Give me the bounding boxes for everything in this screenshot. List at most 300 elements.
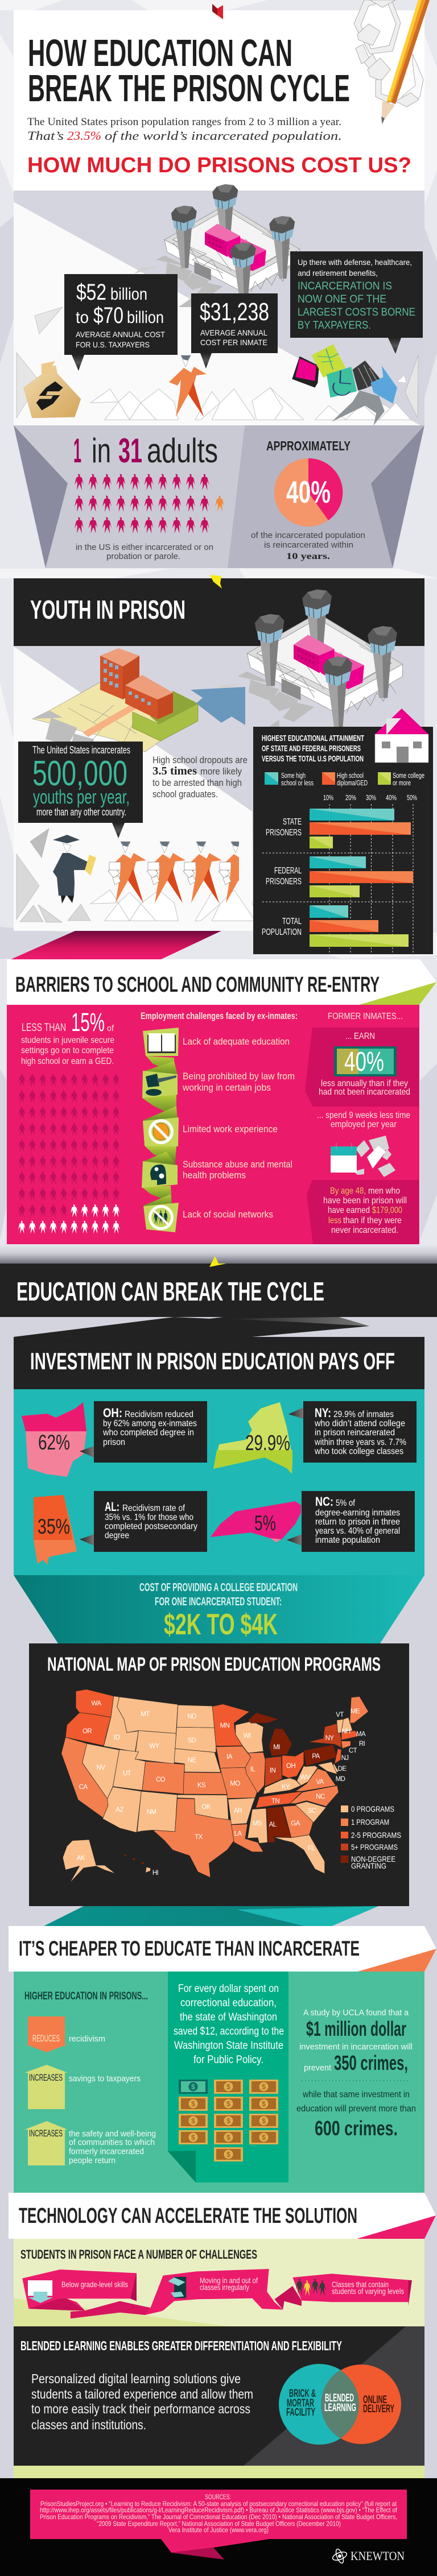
ground triangles bbox=[90, 388, 411, 420]
stat: 1 in 31 adults: 31 bbox=[118, 432, 142, 470]
text: challenge labels: Classes that contain bbox=[332, 2280, 389, 2289]
callout: NC: 5% of bbox=[336, 1498, 355, 1508]
map: state labels: NE bbox=[188, 1757, 196, 1764]
text: employment challenges: Substance abuse and mental bbox=[183, 1159, 292, 1170]
stat: earn 40% less: 40% bbox=[344, 1047, 384, 1077]
chart title: HIGHEST EDUCATIONAL ATTAINMENT bbox=[262, 734, 364, 743]
map: state labels: AR bbox=[234, 1808, 242, 1815]
stat: less than 15% bbox=[21, 1008, 114, 1066]
bar labels: PRISONERS bbox=[266, 828, 302, 838]
map: state labels: ME bbox=[351, 1708, 360, 1715]
callout: cost per inmate: $31,238 bbox=[200, 298, 269, 326]
arrow: increases savings: INCREASES bbox=[29, 2072, 63, 2083]
callout: largest costs: Up there with defense, healthcare, bbox=[298, 258, 412, 267]
map: state labels: MN bbox=[220, 1722, 230, 1729]
map legend: GRANTING bbox=[351, 1861, 386, 1870]
stat: lifetime earnings: By age 48, bbox=[330, 1186, 366, 1196]
illustration: prison building bbox=[212, 590, 403, 731]
state: North Carolina: 5% bbox=[254, 1511, 276, 1535]
callout: largest costs: BY TAXPAYERS. bbox=[298, 320, 371, 332]
pictogram: dollar bills bbox=[179, 2080, 278, 2161]
text: every dollar spent: for Public Policy. bbox=[193, 2054, 263, 2066]
pictogram: 100 students bbox=[18, 1074, 119, 1234]
panel: youth in prison bbox=[14, 575, 433, 954]
ribbon: three challenges bbox=[22, 2269, 412, 2318]
callout: OH: OH: bbox=[103, 1406, 122, 1420]
map: state labels: NH bbox=[341, 1728, 351, 1735]
panel: cheaper to educate bbox=[9, 1926, 436, 2193]
callout: OH: Recidivism reduced bbox=[125, 1410, 193, 1419]
heading: approximately: APPROXIMATELY bbox=[266, 438, 351, 453]
state: Ohio: 62% bbox=[38, 1431, 70, 1454]
strip: lime footer edge bbox=[14, 2466, 424, 2478]
chart: 40% pie bbox=[274, 458, 343, 527]
panel: sources bbox=[30, 2490, 407, 2539]
chart axis bbox=[262, 793, 417, 952]
text: reincarceration caption: of the incarcerated population bbox=[251, 531, 365, 540]
icon: taxpayer with burden blocks bbox=[292, 344, 406, 425]
icon: book bbox=[143, 1028, 179, 1056]
map legend: 5+ PROGRAMS bbox=[351, 1842, 398, 1852]
text: personalized digital learning: to more easily track their performance across bbox=[31, 2401, 250, 2416]
callout: NC: NC: bbox=[315, 1494, 333, 1509]
ribbon: teal fold bbox=[44, 1906, 378, 1926]
callout: OH: by 62% among ex-inmates bbox=[103, 1419, 197, 1428]
callout: OH bbox=[80, 1401, 207, 1463]
icon: red bookmark bbox=[212, 4, 223, 19]
text: 9 weeks: employed per year bbox=[331, 1120, 397, 1129]
chart legend: school or less bbox=[281, 778, 314, 787]
text: every dollar spent: For every dollar spent on bbox=[178, 1983, 279, 1995]
stat: less than 15%: 15% bbox=[71, 1008, 105, 1037]
chart axis: 10% bbox=[323, 793, 333, 802]
icon: money bag bbox=[24, 361, 81, 418]
bar labels: POPULATION bbox=[262, 927, 302, 937]
text: UCLA study: investment in incarceration will bbox=[299, 2042, 413, 2052]
decorative triangles bbox=[17, 829, 90, 922]
text: 1 in 31 caption bbox=[76, 542, 213, 561]
map: state labels: NY bbox=[325, 1735, 334, 1742]
map: state labels: OK bbox=[201, 1804, 211, 1811]
icon: prisoner figure bbox=[169, 355, 207, 417]
map: state labels: OR bbox=[83, 1728, 92, 1735]
text: reincarceration caption: 10 years. bbox=[286, 552, 330, 561]
chart legend bbox=[265, 771, 424, 787]
stat: lifetime earnings: never incarcerated. bbox=[331, 1225, 398, 1235]
text: high school dropouts: more likely bbox=[200, 766, 242, 777]
illustration: school bbox=[32, 648, 198, 753]
map: state labels: MO bbox=[230, 1780, 240, 1787]
panel: barriers to re-entry bbox=[7, 959, 436, 1244]
heading: main title bbox=[28, 32, 350, 110]
callout: AL: degree bbox=[105, 1531, 129, 1540]
stat: lifetime earnings bbox=[307, 1180, 419, 1244]
stat: lifetime earnings: less bbox=[328, 1216, 341, 1225]
stat: earn 40% less: had not been incarcerated bbox=[319, 1087, 410, 1097]
text: UCLA study: while that same investment in bbox=[302, 2090, 410, 2099]
stat: 1 in 31 adults: 1 bbox=[73, 432, 81, 470]
arrow: increases savings: savings to taxpayers bbox=[69, 2074, 141, 2084]
text: high school dropouts: 3.5 times bbox=[152, 765, 197, 777]
banner: education can break the cycle bbox=[0, 1256, 437, 1337]
panel: sources: “2009 State Expenditure Report,” National Association of State Budget Officers (December 2010) bbox=[97, 2520, 341, 2528]
icon: yellow bookmark bbox=[210, 575, 222, 589]
text: challenge labels: Below grade-level skills bbox=[61, 2280, 128, 2289]
map: state labels: WY bbox=[149, 1743, 160, 1750]
stat: lifetime earnings: than if they were bbox=[343, 1216, 402, 1225]
callout: 500,000 youths: more than any other country. bbox=[36, 806, 126, 818]
panel: national map bbox=[29, 1643, 409, 1906]
pictogram: dollar bills: $ bbox=[191, 2082, 196, 2091]
map: state labels: IN bbox=[270, 1767, 275, 1774]
map legend: 2-5 PROGRAMS bbox=[351, 1830, 401, 1840]
map: state labels: AZ bbox=[116, 1807, 123, 1813]
text: UCLA study bbox=[296, 2008, 416, 2140]
icon: graduate bbox=[53, 835, 96, 904]
stat: less than 15%: LESS THAN bbox=[22, 1022, 66, 1034]
text: UCLA study: A study by UCLA found that a bbox=[303, 2008, 409, 2018]
text: intro: 23.5% bbox=[67, 129, 101, 143]
callout: largest costs: LARGEST COSTS BORNE bbox=[298, 307, 415, 318]
text: personalized digital learning bbox=[31, 2371, 253, 2432]
stat: lifetime earnings: have earned bbox=[328, 1206, 370, 1215]
arrow: increases safety: people return bbox=[69, 2156, 116, 2165]
chart title: VERSUS THE TOTAL U.S POPULATION bbox=[262, 754, 364, 764]
bar labels: PRISONERS bbox=[266, 877, 302, 887]
column: washington state bbox=[168, 1972, 288, 2182]
panel: 1 in 31 adults and 40% bbox=[14, 425, 424, 568]
map: state labels: IL bbox=[250, 1766, 255, 1773]
arrow: reduces recidivism: recidivism bbox=[69, 2034, 105, 2044]
decorative triangles bbox=[17, 307, 418, 418]
state: Alabama bbox=[34, 1495, 77, 1565]
map legend: NON-DEGREE bbox=[351, 1854, 395, 1863]
icon: book with down arrow bbox=[28, 2280, 53, 2303]
chart axis: 20% bbox=[345, 793, 356, 802]
callout: AL bbox=[80, 1491, 207, 1552]
map: state labels: VA bbox=[316, 1779, 324, 1786]
stat: less than 15%: of bbox=[107, 1024, 114, 1033]
ribbon: pink fold bbox=[11, 931, 221, 959]
arrow: increases savings bbox=[24, 2065, 141, 2109]
map legend: 0 PROGRAMS bbox=[351, 1804, 394, 1813]
ground triangles bbox=[90, 889, 411, 921]
map: state labels: NM bbox=[147, 1809, 156, 1816]
callout: OH: who completed degree in bbox=[102, 1428, 194, 1438]
text: reincarceration caption bbox=[251, 531, 365, 561]
callout: AL: 35% vs. 1% for those who bbox=[105, 1513, 193, 1522]
panel: title header bbox=[14, 0, 430, 190]
stat: 1 in 31 adults: adults bbox=[147, 432, 218, 470]
icon: house bbox=[375, 709, 428, 763]
text: 1 in 31 caption: probation or parole. bbox=[106, 552, 180, 561]
callout: NY: who took college classes bbox=[314, 1447, 403, 1456]
panel: cost of college education: COST OF PROVIDING A COLLEGE EDUCATION bbox=[139, 1581, 298, 1594]
map: state labels: UT bbox=[123, 1770, 131, 1777]
chart legend: Some college bbox=[393, 771, 424, 780]
callout: cost per inmate: AVERAGE ANNUAL bbox=[200, 328, 267, 337]
state: Ohio bbox=[22, 1402, 86, 1477]
arrow: school to prison bbox=[191, 687, 245, 725]
bar labels: STATE bbox=[283, 817, 302, 827]
stat: earn 40% less: ... EARN bbox=[345, 1032, 375, 1041]
bar chart bbox=[310, 809, 413, 947]
map legend bbox=[341, 1804, 401, 1870]
map: state labels: SC bbox=[308, 1808, 316, 1815]
stat: lifetime earnings: men who bbox=[368, 1186, 400, 1196]
map: state labels: ND bbox=[187, 1713, 196, 1720]
chart axis: 30% bbox=[366, 793, 376, 802]
arrow: increases safety: formerly incarcerated bbox=[69, 2147, 144, 2156]
heading: former inmates: FORMER INMATES... bbox=[328, 1012, 403, 1021]
stat: 1 in 31 adults bbox=[73, 432, 218, 470]
text: high school dropouts bbox=[152, 755, 248, 800]
illustration: prison building bbox=[134, 184, 300, 307]
map: state labels: TX bbox=[195, 1834, 203, 1841]
text: every dollar spent: correctional education, bbox=[180, 1997, 277, 2009]
chart legend: High school bbox=[337, 771, 364, 780]
icon: no social networks bbox=[143, 1203, 179, 1232]
text: personalized digital learning: classes and institutions. bbox=[31, 2417, 146, 2432]
stat: earn 40% less: less annually than if they bbox=[321, 1079, 408, 1088]
text: challenge labels: students of varying levels bbox=[332, 2287, 404, 2296]
callout: largest costs: NOW ONE OF THE bbox=[298, 293, 386, 305]
text: employment challenges: Limited work experience bbox=[183, 1124, 278, 1134]
callout: NY: 29.9% of inmates bbox=[333, 1410, 394, 1419]
chart: 40% pie: 40% bbox=[286, 474, 331, 510]
chart: blended learning venn diagram: LEARNING bbox=[324, 2402, 356, 2414]
panel: blended learning bbox=[14, 2326, 424, 2466]
panel: prison costs bbox=[14, 184, 424, 428]
callout: largest costs: INCARCERATION IS bbox=[298, 280, 392, 292]
bar labels bbox=[262, 817, 302, 937]
chart: blended learning venn diagram: DELIVERY bbox=[363, 2403, 394, 2415]
map: state labels: NV bbox=[97, 1765, 105, 1771]
heading: students face challenges: STUDENTS IN PRISON FACE A NUMBER OF CHALLENGES bbox=[20, 2247, 257, 2262]
icon: pencil breaking handcuffs bbox=[354, 0, 430, 124]
callout: 500,000 youths bbox=[18, 742, 143, 838]
text: 9 weeks bbox=[317, 1111, 410, 1129]
chart title: OF STATE AND FEDERAL PRISONERS bbox=[262, 744, 361, 753]
map: state labels: VT bbox=[336, 1712, 344, 1718]
panel: sources: SOURCES: bbox=[205, 2493, 231, 2501]
chart title bbox=[262, 734, 364, 764]
chart axis: 40% bbox=[386, 793, 397, 802]
chart: blended learning venn diagram: BLENDED bbox=[325, 2392, 354, 2404]
callout: NY: NY: bbox=[315, 1406, 331, 1420]
map: state labels: ID bbox=[114, 1734, 119, 1741]
heading: main title: HOW EDUCATION CAN bbox=[28, 32, 292, 74]
callout: largest costs: and retirement benefits, bbox=[298, 268, 378, 278]
stat: lifetime earnings: $179,000 bbox=[372, 1206, 402, 1215]
chart: blended learning venn diagram: MORTAR bbox=[287, 2397, 314, 2409]
map: state labels: MS bbox=[253, 1820, 262, 1827]
chart legend: diploma/GED bbox=[337, 778, 368, 787]
bar labels: FEDERAL bbox=[274, 866, 302, 876]
text: every dollar spent: Washington State Institute bbox=[174, 2040, 283, 2052]
callout: total annual cost: $70 bbox=[93, 303, 123, 328]
panel: cost of college education: FOR ONE INCARCERATED STUDENT: bbox=[155, 1596, 282, 1608]
map: state labels: RI bbox=[359, 1741, 365, 1747]
text: employment challenges: health problems bbox=[183, 1170, 246, 1181]
callout: NC: years vs. 40% of general bbox=[315, 1526, 400, 1536]
callout: 500,000 youths: youths per year, bbox=[33, 786, 130, 808]
chart: blended learning venn diagram: BRICK & bbox=[289, 2388, 316, 2400]
logo: Knewton: KNEWTON bbox=[351, 2549, 405, 2563]
icon: people of varying levels bbox=[296, 2279, 326, 2296]
callout: total annual cost: billion bbox=[110, 285, 147, 304]
chart: blended learning venn diagram: ONLINE bbox=[363, 2394, 387, 2406]
map: state labels: SD bbox=[188, 1737, 196, 1744]
callout: cost per inmate: COST PER INMATE bbox=[200, 338, 267, 347]
map: state labels: KS bbox=[197, 1782, 206, 1789]
text: employment challenges: working in certain jobs bbox=[182, 1082, 271, 1093]
callout: NY: in prison reincarerated bbox=[315, 1428, 395, 1438]
icon: door with arrows bbox=[168, 2277, 186, 2298]
map: state labels: IA bbox=[226, 1754, 233, 1761]
text: personalized digital learning: students a tailored experience and allow them bbox=[31, 2387, 253, 2401]
stat: earn 40% less bbox=[305, 1028, 419, 1107]
map: US states bbox=[61, 1689, 369, 1883]
map: state labels: CO bbox=[156, 1776, 166, 1783]
text: challenge labels bbox=[61, 2276, 404, 2296]
map: state labels: HI bbox=[152, 1870, 159, 1877]
map: state labels: LA bbox=[234, 1830, 242, 1837]
callout: total annual cost: billion bbox=[127, 308, 164, 327]
text: UCLA study: education will prevent more than bbox=[296, 2104, 416, 2114]
map: state labels bbox=[77, 1700, 366, 1877]
text: intro bbox=[27, 116, 342, 143]
callout: total annual cost bbox=[64, 274, 178, 371]
map: state labels: OH bbox=[286, 1763, 295, 1770]
map: state labels: AK bbox=[77, 1855, 85, 1862]
callout: AL: completed postsecondary bbox=[105, 1522, 197, 1531]
callout: NY: who didn’t attend college bbox=[314, 1419, 405, 1428]
chart legend: Some high bbox=[281, 771, 306, 780]
text: UCLA study: 600 crimes. bbox=[315, 2117, 398, 2140]
text: employment challenges bbox=[182, 1036, 295, 1220]
callout: NC: degree-earning inmates bbox=[315, 1508, 400, 1518]
panel: cost of college education: $2K TO $4K bbox=[164, 1608, 278, 1641]
map: state labels: TN bbox=[271, 1798, 279, 1805]
stat: lifetime earnings: have been in prison will bbox=[323, 1196, 407, 1206]
map: state labels: KY bbox=[282, 1784, 290, 1791]
map: state labels: NC bbox=[316, 1794, 325, 1800]
icon: calendar bbox=[331, 1136, 395, 1177]
stat: less than 15%: students in juvenile secure bbox=[21, 1036, 114, 1045]
text: challenge labels: Moving in and out of bbox=[200, 2276, 258, 2285]
panel: educational attainment chart bbox=[253, 709, 433, 954]
icons: prisoners in a row bbox=[108, 842, 239, 903]
callout: total annual cost: to bbox=[76, 308, 89, 327]
callout: cost per inmate bbox=[191, 293, 278, 368]
text: high school dropouts: school graduates. bbox=[152, 789, 218, 800]
text: 9 weeks: ... spend 9 weeks less time bbox=[317, 1111, 410, 1120]
map: state labels: MI bbox=[273, 1744, 280, 1751]
stat: less than 15%: settings go on to complete bbox=[21, 1046, 114, 1055]
stat: 1 in 31 adults: in bbox=[92, 432, 111, 470]
map: state labels: CT bbox=[349, 1747, 357, 1754]
text: personalized digital learning: Personalized digital learning solutions give bbox=[31, 2371, 241, 2386]
text: UCLA study: prevent bbox=[304, 2063, 332, 2073]
arrow: increases safety: the safety and well-being bbox=[69, 2129, 156, 2139]
map: state labels: GA bbox=[291, 1820, 300, 1827]
callout: total annual cost: FOR U.S. TAXPAYERS bbox=[76, 340, 150, 349]
text: every dollar spent: saved $12, according to the bbox=[174, 2026, 284, 2037]
panel: technology bbox=[9, 2193, 436, 2326]
panel: cost of college education bbox=[14, 1575, 424, 1643]
text: challenge labels: classes irregularly bbox=[200, 2283, 249, 2292]
logo: Knewton bbox=[332, 2548, 405, 2564]
state: New York bbox=[213, 1402, 292, 1474]
map: state labels: PA bbox=[312, 1753, 320, 1760]
arrow: increases safety: INCREASES bbox=[29, 2128, 63, 2139]
arrow: increases safety: of communities to which bbox=[69, 2138, 155, 2147]
callout: AL: AL: bbox=[105, 1500, 119, 1514]
text: every dollar spent bbox=[174, 1983, 284, 2066]
callout: OH: prison bbox=[103, 1438, 125, 1447]
text: employment challenges: Being prohibited by law from bbox=[183, 1071, 295, 1082]
map: state labels: MA bbox=[356, 1731, 366, 1738]
text: intro: That’s bbox=[27, 129, 64, 143]
heading: employment challenges: Employment challenges faced by ex-inmates: bbox=[141, 1010, 298, 1021]
map: state labels: CA bbox=[79, 1784, 88, 1791]
ribbon of challenge icons bbox=[142, 1028, 179, 1232]
callout: AL: Recidivism rate of bbox=[122, 1504, 185, 1513]
icon: no experience bbox=[143, 1117, 179, 1146]
map: state labels: FL bbox=[308, 1845, 315, 1852]
map: state labels: DE bbox=[338, 1766, 347, 1772]
text: employment challenges: Lack of social networks bbox=[183, 1209, 273, 1220]
icon: gavel bbox=[142, 1071, 178, 1098]
callout: NC: inmate population bbox=[315, 1535, 380, 1545]
state: New York: 29.9% bbox=[245, 1431, 290, 1455]
text: every dollar spent: the state of Washington bbox=[180, 2011, 277, 2023]
map: state labels: WA bbox=[92, 1700, 101, 1707]
text: high school dropouts: High school dropouts are bbox=[152, 755, 248, 765]
panel: sources: Vera Institute of Justice (www.vera.org) bbox=[168, 2526, 269, 2534]
text: high school dropouts: to be arrested than high bbox=[152, 777, 242, 788]
icon: head with gears bbox=[142, 1161, 178, 1188]
callout: NY: within three years vs. 7.7% bbox=[314, 1438, 406, 1447]
text: intro: The United States prison population ranges from 2 to 3 million a year. bbox=[27, 116, 341, 128]
callout: total annual cost: AVERAGE ANNUAL COST bbox=[76, 330, 165, 339]
callout: largest costs bbox=[290, 251, 423, 354]
heading: how much do prisons cost us: HOW MUCH DO PRISONS COST US? bbox=[27, 154, 411, 177]
map: state labels: MD bbox=[336, 1776, 345, 1783]
pictogram: 31 people bbox=[75, 474, 224, 533]
chart legend: or more bbox=[393, 778, 411, 787]
map: state labels: WV bbox=[300, 1774, 311, 1781]
callout: 500,000 youths: The United States incarcerates bbox=[32, 744, 130, 756]
state: Alabama: 35% bbox=[38, 1515, 70, 1538]
text: intro: of the world’s incarcerated population. bbox=[105, 129, 342, 143]
arrow: reduces recidivism: REDUCES bbox=[32, 2033, 60, 2044]
map: state labels: NJ bbox=[341, 1755, 348, 1762]
arrow: increases safety bbox=[24, 2121, 156, 2165]
map: state labels: MT bbox=[141, 1711, 150, 1718]
icon: yellow bookmark bbox=[209, 1256, 226, 1267]
arrow: reduces recidivism bbox=[26, 2016, 105, 2052]
callout: total annual cost: $52 bbox=[76, 280, 106, 305]
state: North Carolina bbox=[211, 1501, 301, 1542]
chart: blended learning venn diagram bbox=[279, 2364, 401, 2445]
map legend: 1 PROGRAM bbox=[351, 1817, 389, 1827]
callout: NC: return to prison in three bbox=[315, 1517, 400, 1527]
map: state labels: AL bbox=[269, 1821, 277, 1828]
panel: investment pays off bbox=[14, 1337, 424, 1575]
map: state labels: WI bbox=[244, 1733, 251, 1740]
